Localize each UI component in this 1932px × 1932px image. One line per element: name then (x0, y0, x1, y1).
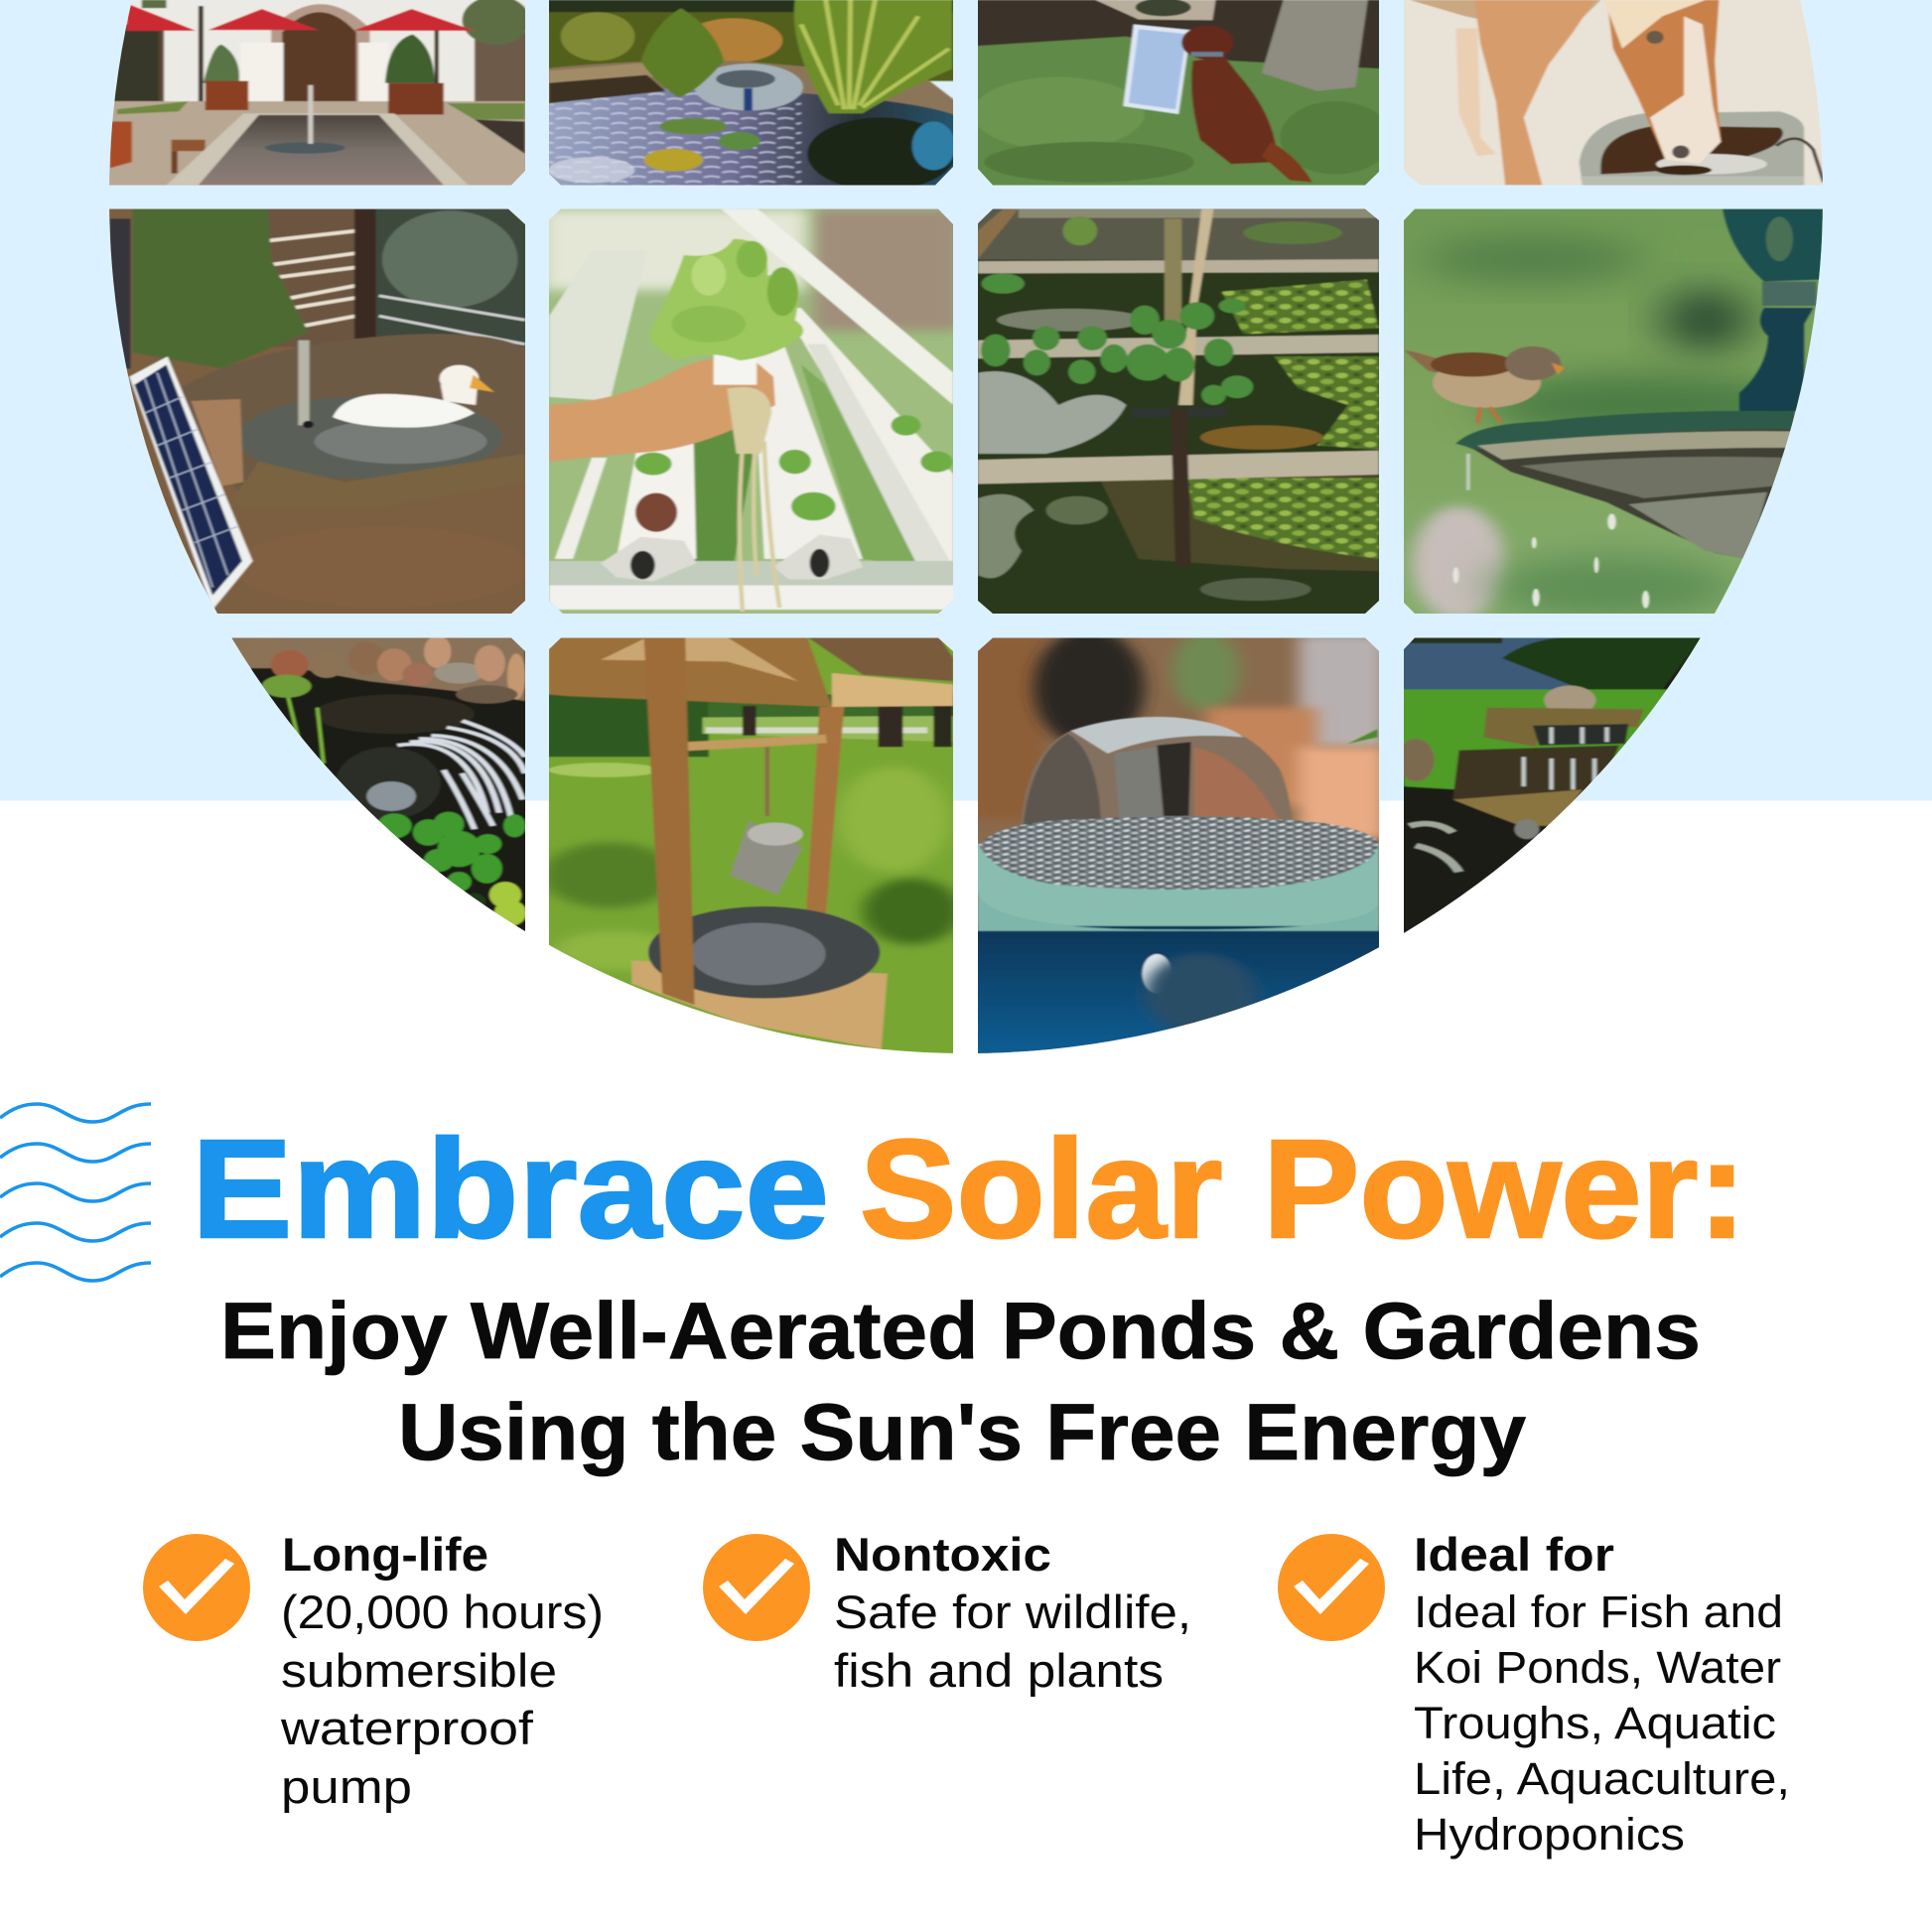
feature: long-life: submersible (281, 1644, 557, 1697)
feature: long-life: pump (281, 1760, 412, 1813)
photo: rock waterfall pond (1404, 637, 1701, 933)
feature: long-life (280, 1528, 604, 1813)
photo: pond with floating fountain (542, 0, 961, 191)
photo: dog beside solar panel (966, 0, 1391, 187)
photo: wishing well fountain (542, 635, 961, 1059)
icon: check badge 3 (1278, 1534, 1385, 1641)
icon: check badge 2 (703, 1534, 810, 1641)
photo mosaic disc (92, 0, 1841, 1059)
feature: ideal for: Hydroponics (1414, 1809, 1685, 1860)
feature: long-life: waterproof (280, 1702, 534, 1754)
feature: ideal for: Life, Aquaculture, (1414, 1753, 1790, 1804)
feature: ideal for: Troughs, Aquatic (1414, 1698, 1776, 1748)
subheading (220, 1287, 1701, 1477)
photo: sparrow on ornate bird bath (1397, 207, 1841, 620)
feature: nontoxic: Safe for wildlife, (834, 1586, 1191, 1638)
feature: long-life: (20,000 hours) (281, 1586, 604, 1638)
photo: duck in solar-fountain pond (92, 207, 530, 616)
icon: check badge 1 (143, 1534, 250, 1641)
photo: koi pond with timber frame (966, 207, 1385, 616)
subheading: Enjoy Well-Aerated Ponds & Gardens (220, 1287, 1701, 1376)
photo: hand holding hydroponic lettuce (542, 207, 961, 616)
feature: nontoxic: Nontoxic (834, 1528, 1051, 1581)
heading: Embrace Solar Power: Embrace (192, 1110, 829, 1267)
feature: long-life: Long-life (282, 1528, 488, 1581)
photo: rock pond with ripples (231, 637, 525, 931)
subheading: Using the Sun's Free Energy (398, 1388, 1526, 1477)
feature: nontoxic (834, 1528, 1191, 1697)
photo: horse drinking from trough (1397, 0, 1835, 187)
heading: Embrace Solar Power: Solar Power: (860, 1110, 1746, 1267)
feature: ideal for: Koi Ponds, Water (1414, 1642, 1781, 1693)
feature: ideal for: Ideal for Fish and (1414, 1587, 1783, 1637)
light blue background band (0, 0, 1932, 800)
heading: Embrace Solar Power (192, 1110, 1746, 1267)
feature: nontoxic: fish and plants (834, 1644, 1164, 1697)
feature: ideal for: Ideal for (1414, 1528, 1614, 1581)
photo: ceramic urn bubbling fountain (966, 628, 1391, 1059)
feature: ideal for (1414, 1528, 1790, 1860)
photo: courtyard reflecting pool (92, 0, 536, 187)
wave icon (0, 1104, 151, 1281)
